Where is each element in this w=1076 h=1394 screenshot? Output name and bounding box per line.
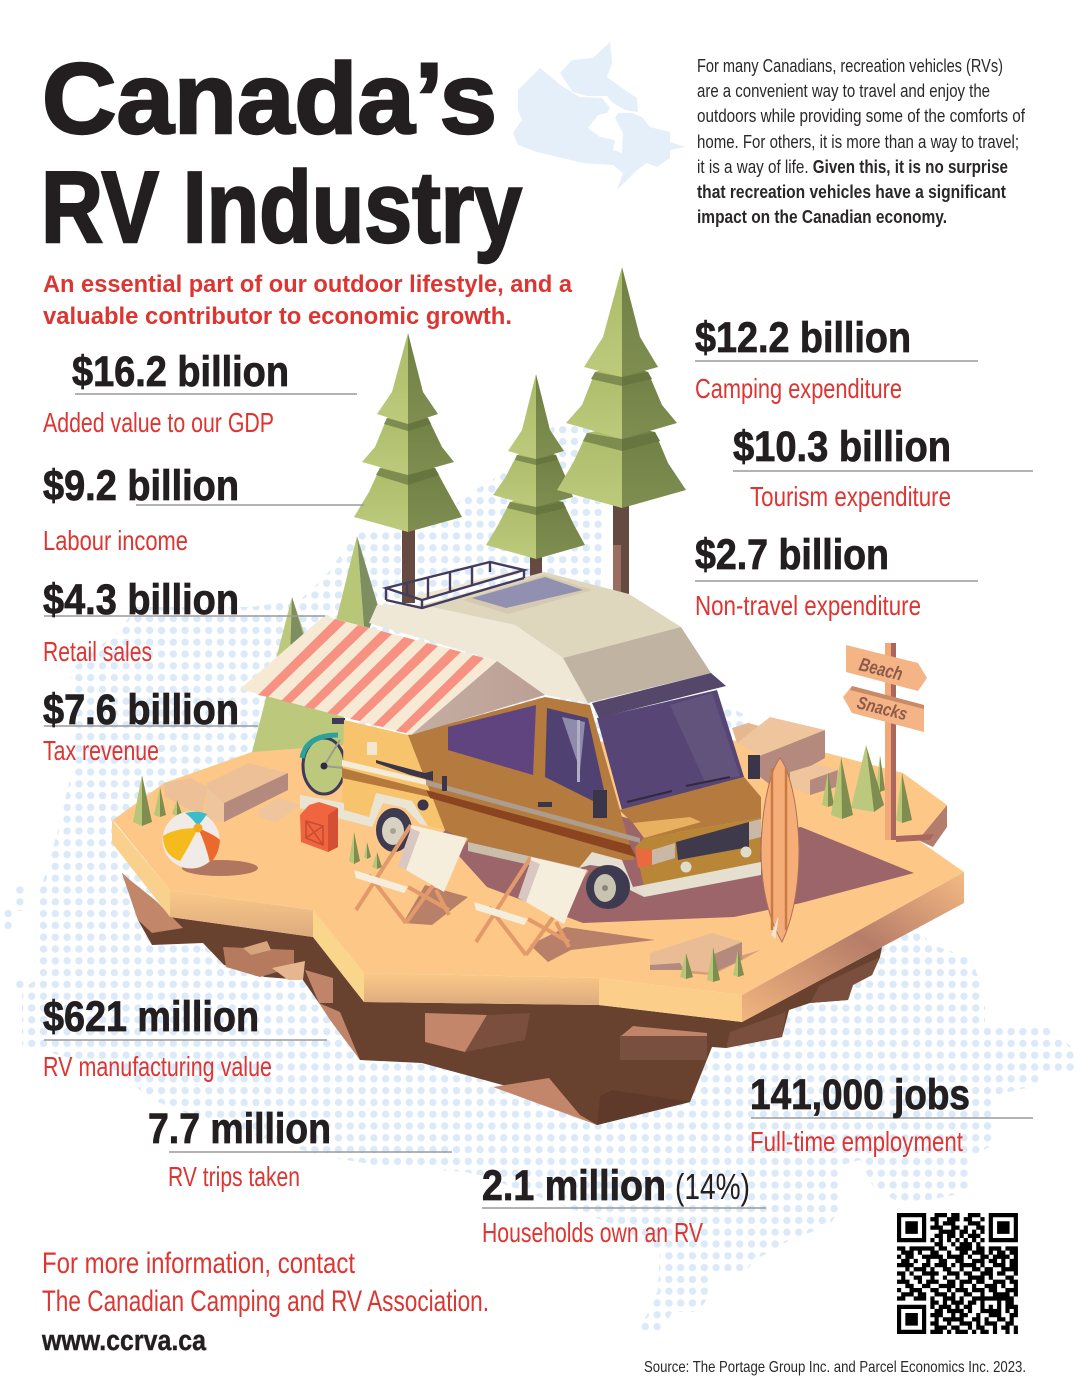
stat: retail sales: Retail sales (43, 636, 152, 667)
stat: camping: $12.2 billion (695, 314, 911, 362)
deck chair 1 (354, 825, 467, 923)
stat: retail sales: $4.3 billion (43, 576, 239, 624)
intro text: home. For others, it is more than a way to travel; (697, 132, 1019, 152)
stat: tourism: Tourism expenditure (750, 481, 951, 512)
stat: non-travel: Non-travel expenditure (695, 590, 921, 621)
title: Canada’s (42, 43, 497, 155)
subtitle: An essential part of our outdoor lifestyle, and a (43, 271, 573, 298)
stat: camping (695, 314, 978, 404)
stat: RV trips (148, 1105, 452, 1192)
stat: non-travel: $2.7 billion (695, 531, 889, 579)
icon: bicycle (302, 718, 345, 794)
awning side (411, 661, 545, 735)
stat: retail sales (43, 576, 325, 667)
intro text: outdoors while providing some of the comforts of (697, 106, 1026, 126)
van details (376, 760, 552, 810)
van mirrors (593, 755, 760, 818)
small trees (133, 745, 912, 982)
stat: labour income: Labour income (43, 525, 188, 556)
van skirt (300, 793, 428, 827)
stat: tax revenue: Tax revenue (43, 735, 159, 766)
intro text: impact on the Canadian economy. (697, 207, 947, 227)
tree: left large (354, 333, 462, 603)
shadows on island (182, 780, 914, 975)
roof rack (386, 562, 524, 608)
title (41, 43, 522, 264)
stat: tourism: $10.3 billion (733, 423, 951, 471)
intro text: it is a way of life. Given this, it is no surprise (697, 157, 1008, 177)
signpost: Snacks (855, 692, 909, 724)
van front roof (563, 627, 711, 703)
icon: surfboard (761, 758, 799, 942)
title: RV Industry (41, 152, 522, 264)
icon: jerry can (300, 802, 338, 852)
van side panel in shade (408, 697, 634, 868)
stat: labour income (43, 462, 364, 556)
rock: front (650, 933, 742, 973)
stat: labour income: $9.2 billion (43, 462, 239, 510)
intro text: For many Canadians, recreation vehicles (RVs) (697, 56, 1003, 76)
stat: manufacturing: $621 million (43, 993, 259, 1041)
awning (240, 616, 497, 735)
island top surface and edges (112, 740, 964, 1022)
van hood (619, 777, 761, 838)
illustration: floating island with RV (112, 267, 964, 1125)
contact block: For more information, contact (42, 1247, 356, 1280)
intro text (697, 56, 1026, 227)
stat: tax revenue: $7.6 billion (43, 686, 239, 734)
stat: households: 2.1 million (482, 1162, 666, 1210)
tree: middle (486, 374, 585, 601)
stat: tourism (733, 423, 1033, 512)
stat: RV trips: 7.7 million (148, 1105, 331, 1153)
stat: jobs: 141,000 jobs (750, 1071, 970, 1119)
stat: jobs (750, 1071, 1033, 1157)
small map of Canada (513, 42, 685, 190)
deck chair 2 (474, 857, 587, 955)
van door window (545, 708, 604, 803)
van side stripes (342, 760, 640, 857)
van small vent (367, 742, 377, 755)
intro text: that recreation vehicles have a significant (697, 182, 1006, 202)
intro text: are a convenient way to travel and enjoy the (697, 81, 990, 101)
subtitle: valuable contributor to economic growth. (43, 303, 512, 330)
van rear wheel (376, 808, 412, 852)
stat: tax revenue (43, 686, 258, 766)
contact block: www.ccrva.ca (41, 1325, 207, 1357)
van front wheel (586, 865, 630, 909)
van upper roof (422, 572, 681, 658)
stat: manufacturing: RV manufacturing value (43, 1051, 272, 1082)
QR code (897, 1215, 1018, 1332)
stat: GDP (43, 348, 357, 438)
van sun visor (592, 673, 726, 718)
van left roof (369, 605, 588, 703)
van rear window (448, 705, 536, 775)
contact block: The Canadian Camping and RV Association. (42, 1285, 489, 1318)
RV van (240, 562, 761, 909)
rocks: left (164, 763, 300, 822)
stat: GDP: $16.2 billion (72, 348, 289, 396)
subtitle (43, 271, 573, 330)
stat: jobs: Full-time employment (750, 1126, 963, 1157)
skylight (463, 575, 592, 614)
van windshield (597, 690, 744, 810)
rocks: right (732, 717, 838, 795)
stat: households: (14%) (675, 1166, 750, 1207)
contact block (41, 1247, 489, 1357)
van side panel in sun (342, 720, 445, 830)
signpost (843, 643, 934, 842)
van front (633, 818, 761, 897)
rock underside of island (122, 873, 882, 1125)
stat: non-travel (695, 531, 978, 621)
stat: households: Households own an RV (482, 1217, 703, 1248)
tree: cone behind roof (335, 536, 378, 640)
tree: right large (557, 267, 686, 601)
tree: cone behind awning (252, 597, 344, 785)
stat: camping: Camping expenditure (695, 373, 902, 404)
stat: households (482, 1162, 766, 1248)
stat: RV trips: RV trips taken (168, 1161, 300, 1192)
icon: beach ball (162, 812, 220, 868)
stat: GDP: Added value to our GDP (43, 407, 274, 438)
van front wheel arch (579, 852, 644, 897)
van lower sill (468, 842, 581, 876)
signpost: Beach (857, 654, 905, 685)
background dotted map of Canada (0, 400, 1076, 1360)
stat: manufacturing (43, 993, 327, 1082)
